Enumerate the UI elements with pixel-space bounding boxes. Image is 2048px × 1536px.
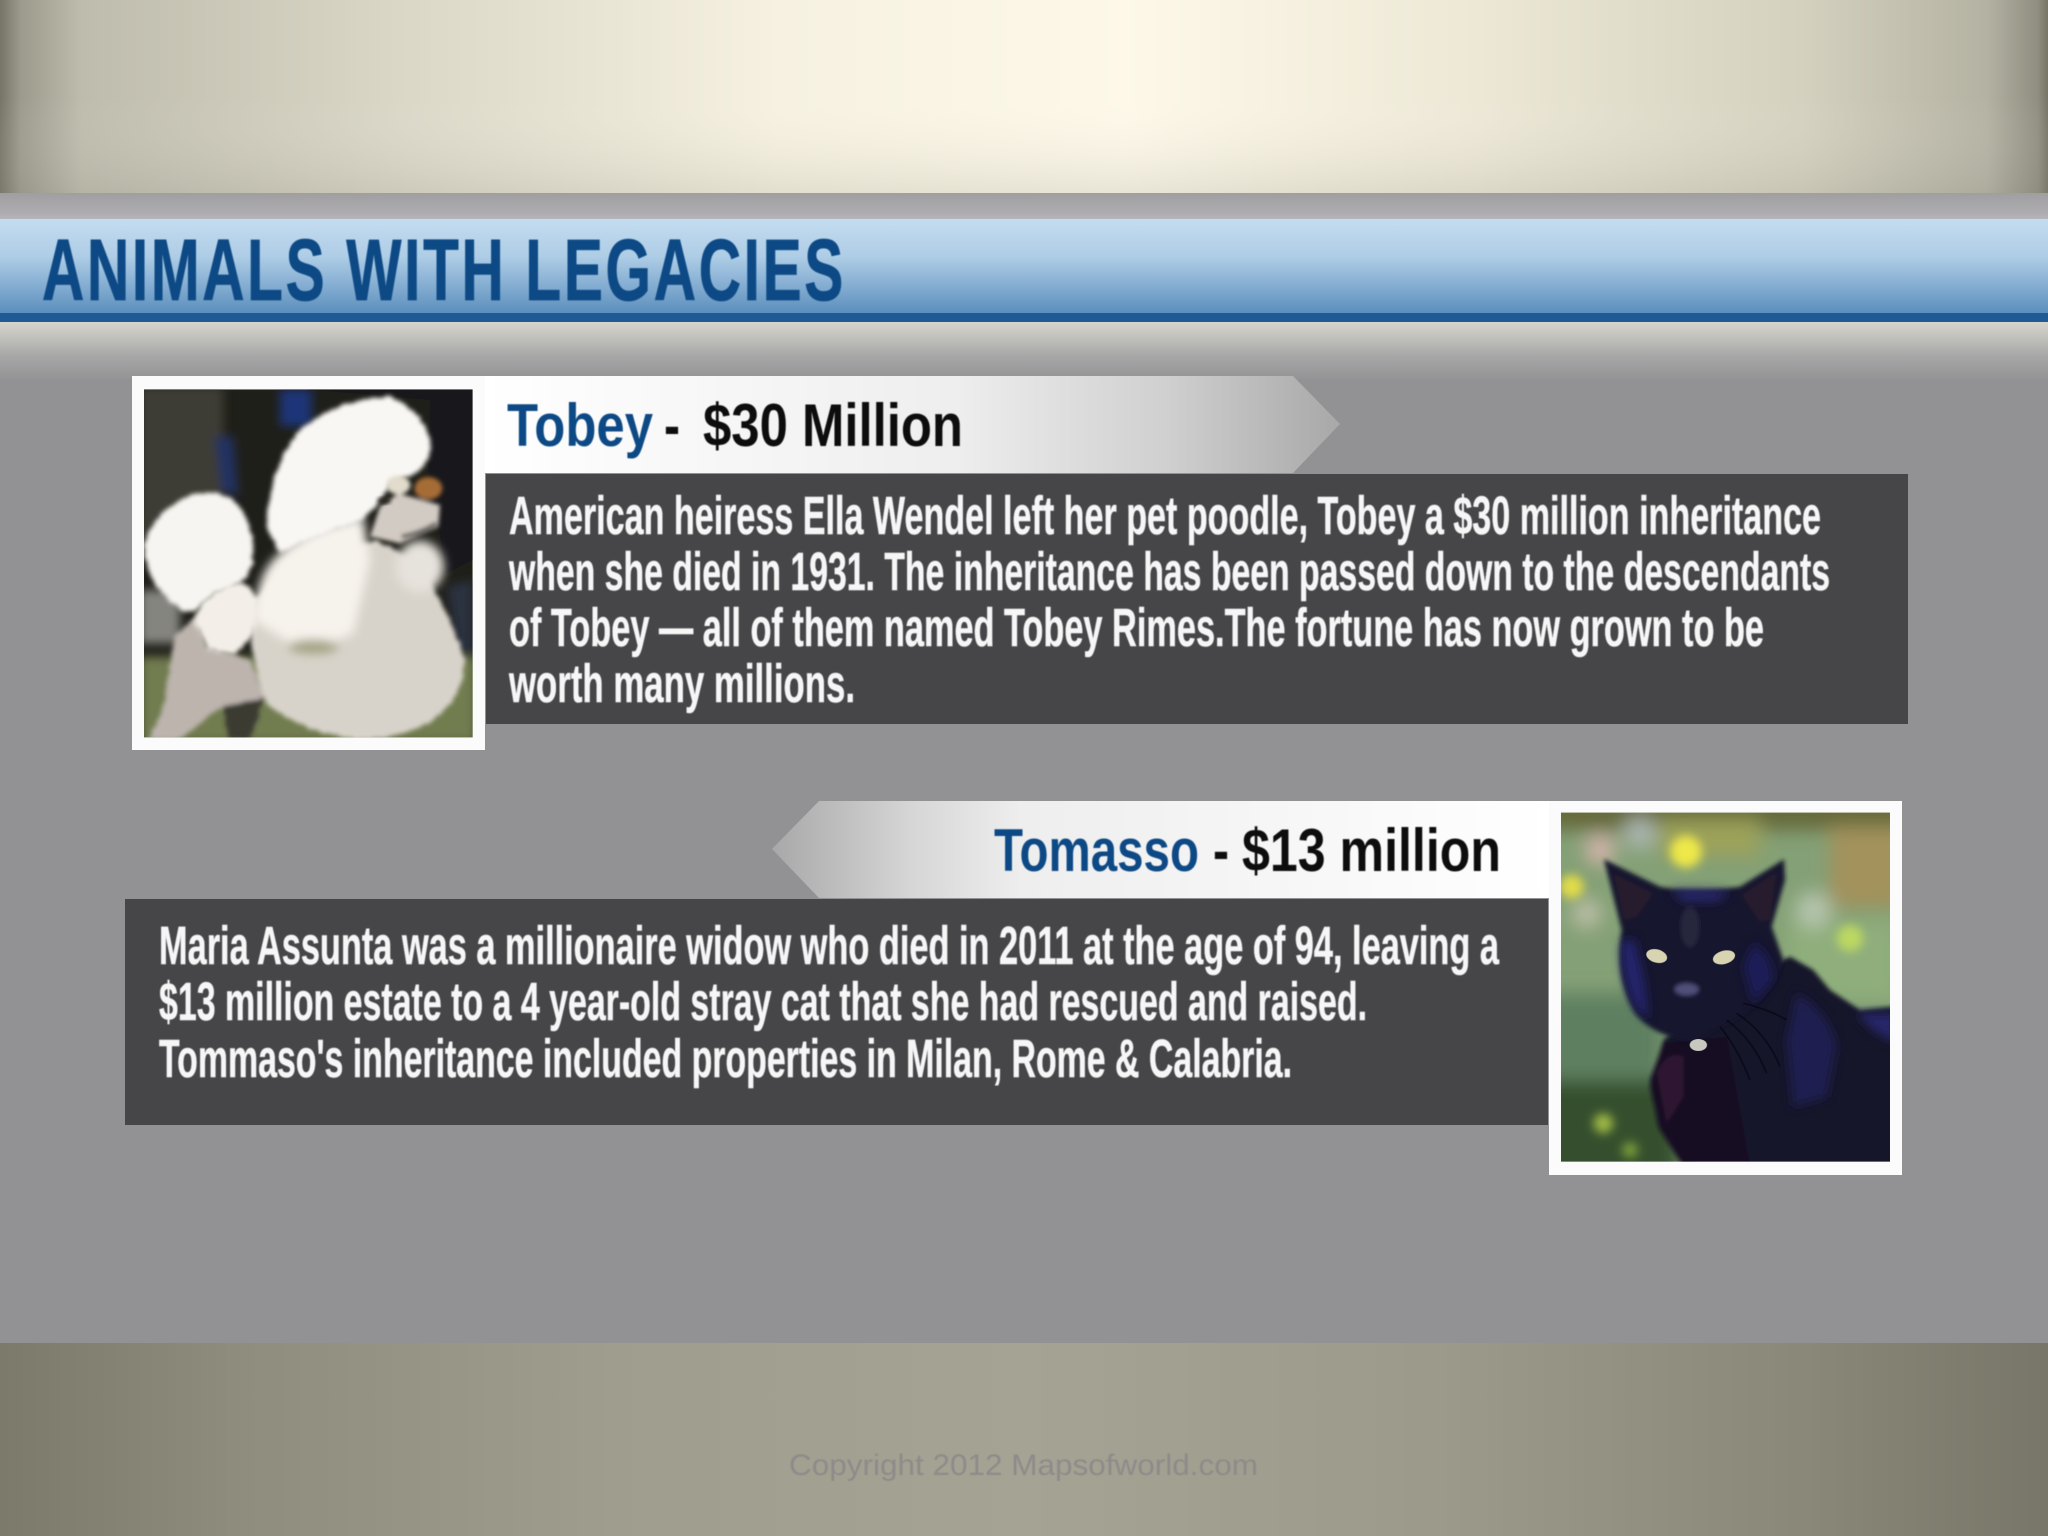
heading arrow: Tomasso bbox=[772, 801, 1549, 898]
photo frame: poodle bbox=[132, 376, 485, 750]
title banner bbox=[0, 219, 2048, 322]
photo: poodle bbox=[140, 387, 477, 743]
text box: Tobey description: worth many millions. bbox=[508, 654, 855, 714]
cat eyes bbox=[1645, 947, 1737, 1051]
main panel background bbox=[0, 380, 2048, 1343]
top background bbox=[0, 0, 2048, 194]
heading: Tobey - $30 Million: $30 Million bbox=[703, 392, 963, 459]
heading: Tomasso - $13 million bbox=[994, 817, 1501, 884]
photo frame: cat bbox=[1549, 801, 1902, 1175]
panel: Tobey bbox=[132, 376, 1908, 750]
heading: Tomasso - $13 million: - bbox=[1213, 817, 1229, 884]
text box: Tomasso description: Tommaso's inheritance included properties in Milan, Rome & Calabria. bbox=[159, 1029, 1292, 1089]
cat head bbox=[1604, 859, 1785, 1042]
heading: Tobey - $30 Million: - bbox=[664, 392, 680, 459]
heading: Tomasso - $13 million: $13 million bbox=[1242, 817, 1501, 884]
text box: Tomasso description: $13 million estate to a 4 year-old stray cat that she had rescued and raised. bbox=[159, 972, 1367, 1032]
heading: Tobey - $30 Million bbox=[507, 392, 963, 459]
photo: black cat bbox=[1561, 812, 1890, 1162]
panel: Tomasso bbox=[125, 793, 1910, 1187]
heading: Tomasso - $13 million: Tomasso bbox=[994, 817, 1199, 884]
light band under title bbox=[0, 322, 2048, 380]
heading: Tobey - $30 Million: Tobey bbox=[507, 392, 654, 459]
title: ANIMALS WITH LEGACIES bbox=[42, 222, 846, 319]
bottom background bbox=[0, 1343, 2048, 1536]
heading arrow: Tobey bbox=[485, 376, 1340, 473]
copyright: Copyright 2012 Mapsofworld.com bbox=[789, 1449, 1258, 1482]
text box: Tobey description bbox=[486, 474, 1908, 724]
grey band above title bbox=[0, 193, 2048, 219]
cat body bbox=[1650, 957, 1895, 1167]
text box: Tomasso description bbox=[125, 899, 1548, 1125]
